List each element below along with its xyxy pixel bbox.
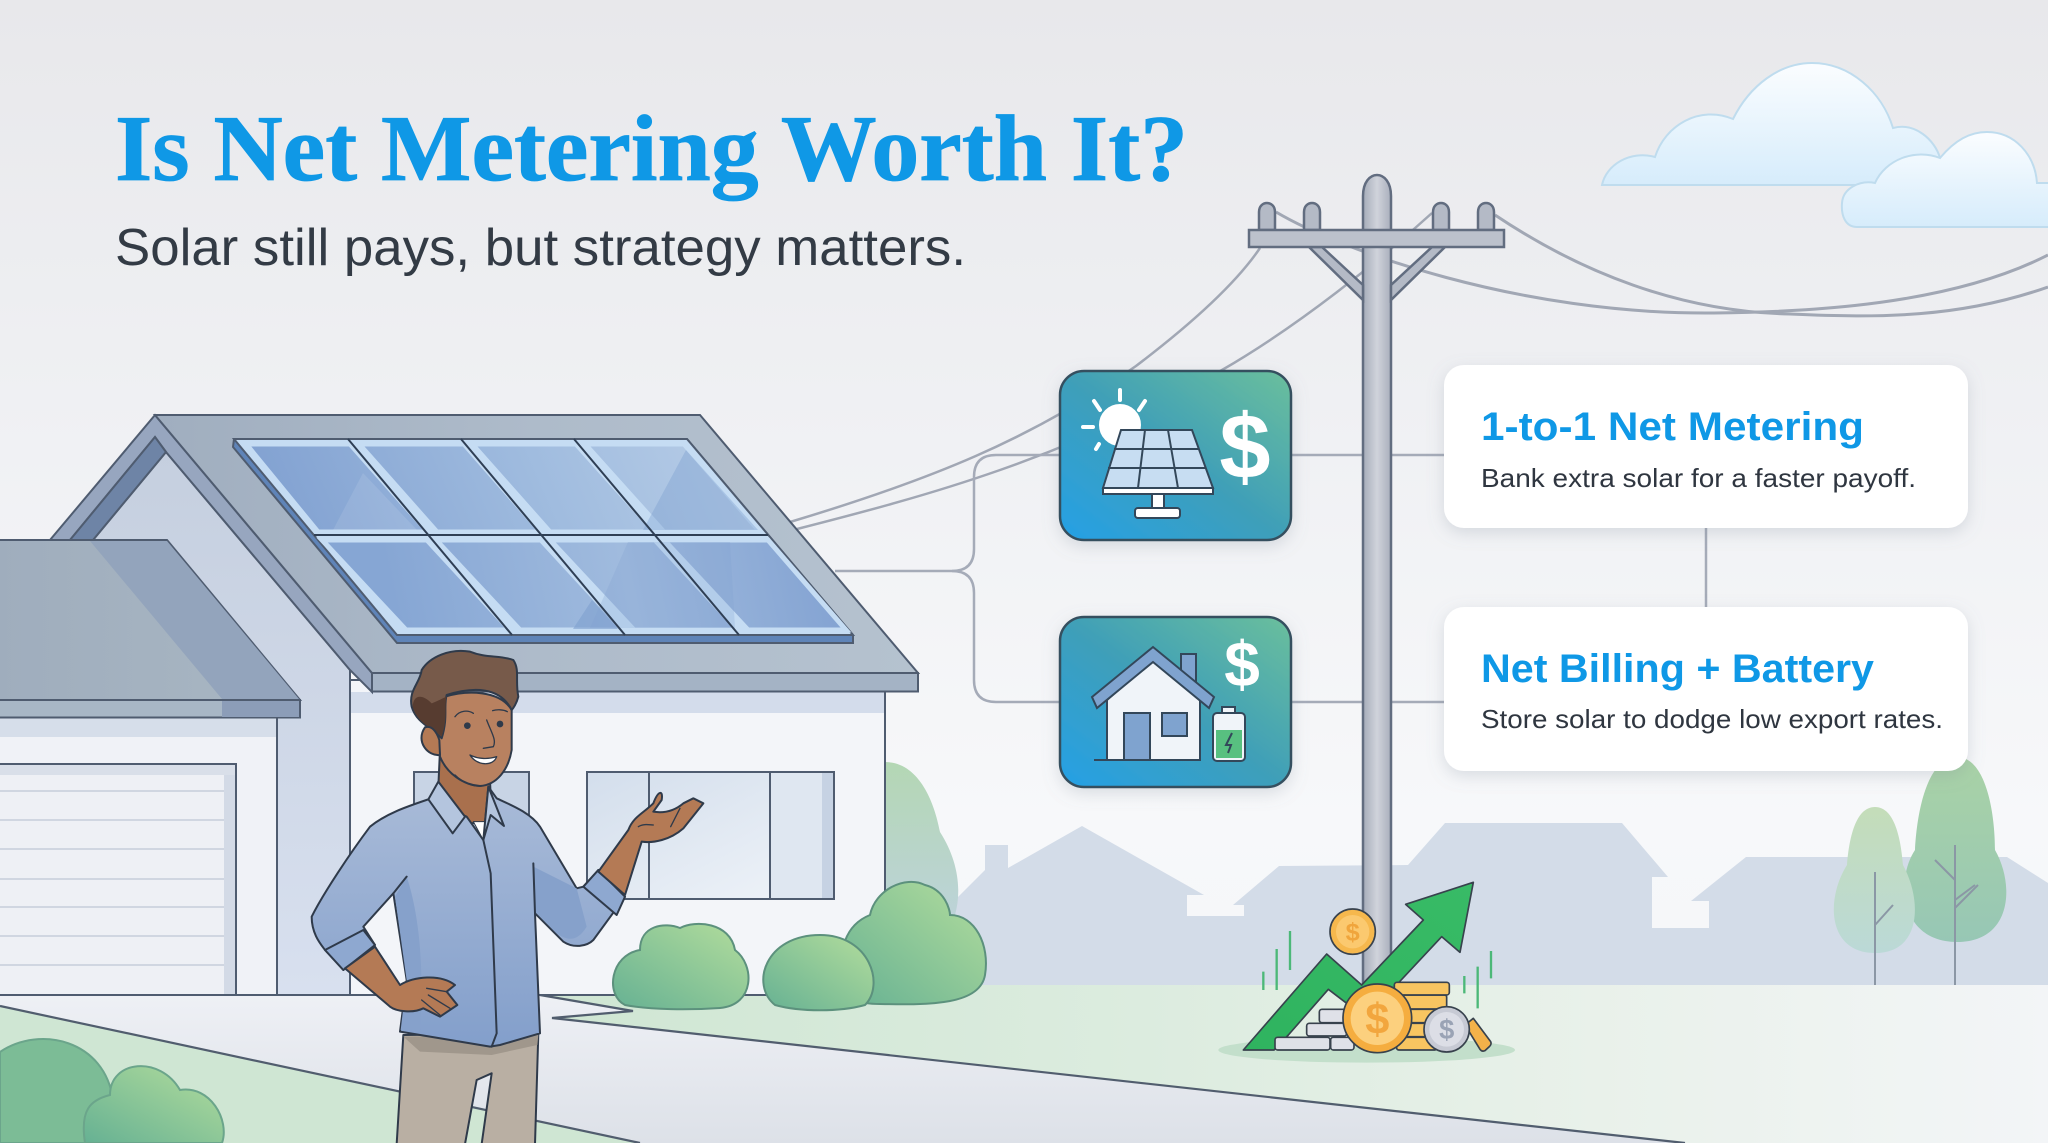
card description: Store solar to dodge low export rates.	[1481, 704, 1943, 734]
card: net billing plus battery	[1444, 607, 1968, 771]
person presenting	[312, 651, 703, 1143]
large coin	[1343, 984, 1412, 1053]
solar panel array	[233, 439, 853, 643]
savings growth arrow and coins	[1218, 882, 1515, 1063]
card heading: Net Billing + Battery	[1481, 647, 1875, 691]
gold coin stack	[1394, 982, 1449, 1050]
icon tile: house with battery and dollar	[1060, 617, 1291, 787]
large coin: $	[1365, 996, 1389, 1044]
connector lines	[835, 455, 1706, 702]
hand on hip	[345, 947, 457, 1017]
background house silhouettes	[955, 823, 2048, 985]
card description: Bank extra solar for a faster payoff.	[1481, 463, 1916, 493]
windows	[414, 772, 834, 899]
ground and road	[0, 985, 2048, 1143]
clouds	[1602, 63, 2048, 227]
utility wires	[790, 212, 2048, 529]
dollar sign: $	[1224, 628, 1260, 700]
small coin	[1330, 909, 1375, 954]
neck	[438, 750, 492, 823]
sun icon	[1083, 390, 1145, 449]
house walls	[0, 452, 885, 995]
house	[0, 415, 918, 995]
small coin: $	[1346, 919, 1360, 947]
subtitle: Solar still pays, but strategy matters.	[115, 219, 966, 277]
magnifier handle	[1465, 1018, 1491, 1051]
title: Is Net Metering Worth It?	[115, 97, 1188, 201]
silver coin	[1424, 1007, 1469, 1052]
dollar sign: $	[1219, 396, 1271, 498]
card heading: 1-to-1 Net Metering	[1481, 405, 1864, 449]
icon tile: solar panel with dollar	[1060, 371, 1291, 540]
shrubs	[613, 882, 986, 1010]
silver coin: $	[1439, 1014, 1454, 1045]
foreground bushes	[0, 1039, 224, 1143]
solar panel icon	[1103, 430, 1213, 518]
shirt	[312, 782, 625, 1047]
main roof	[50, 415, 918, 692]
garage roof	[0, 540, 300, 718]
raised hand	[598, 793, 703, 895]
distant trees	[885, 757, 2006, 985]
silver bars	[1275, 1009, 1354, 1050]
utility pole	[1249, 175, 1504, 985]
garage door	[0, 764, 236, 995]
head	[411, 651, 518, 786]
house icon	[1092, 647, 1214, 760]
green arrow	[1243, 882, 1473, 1050]
card: 1-to-1 net metering	[1444, 365, 1968, 528]
battery icon	[1213, 707, 1245, 761]
trousers	[397, 1033, 538, 1143]
